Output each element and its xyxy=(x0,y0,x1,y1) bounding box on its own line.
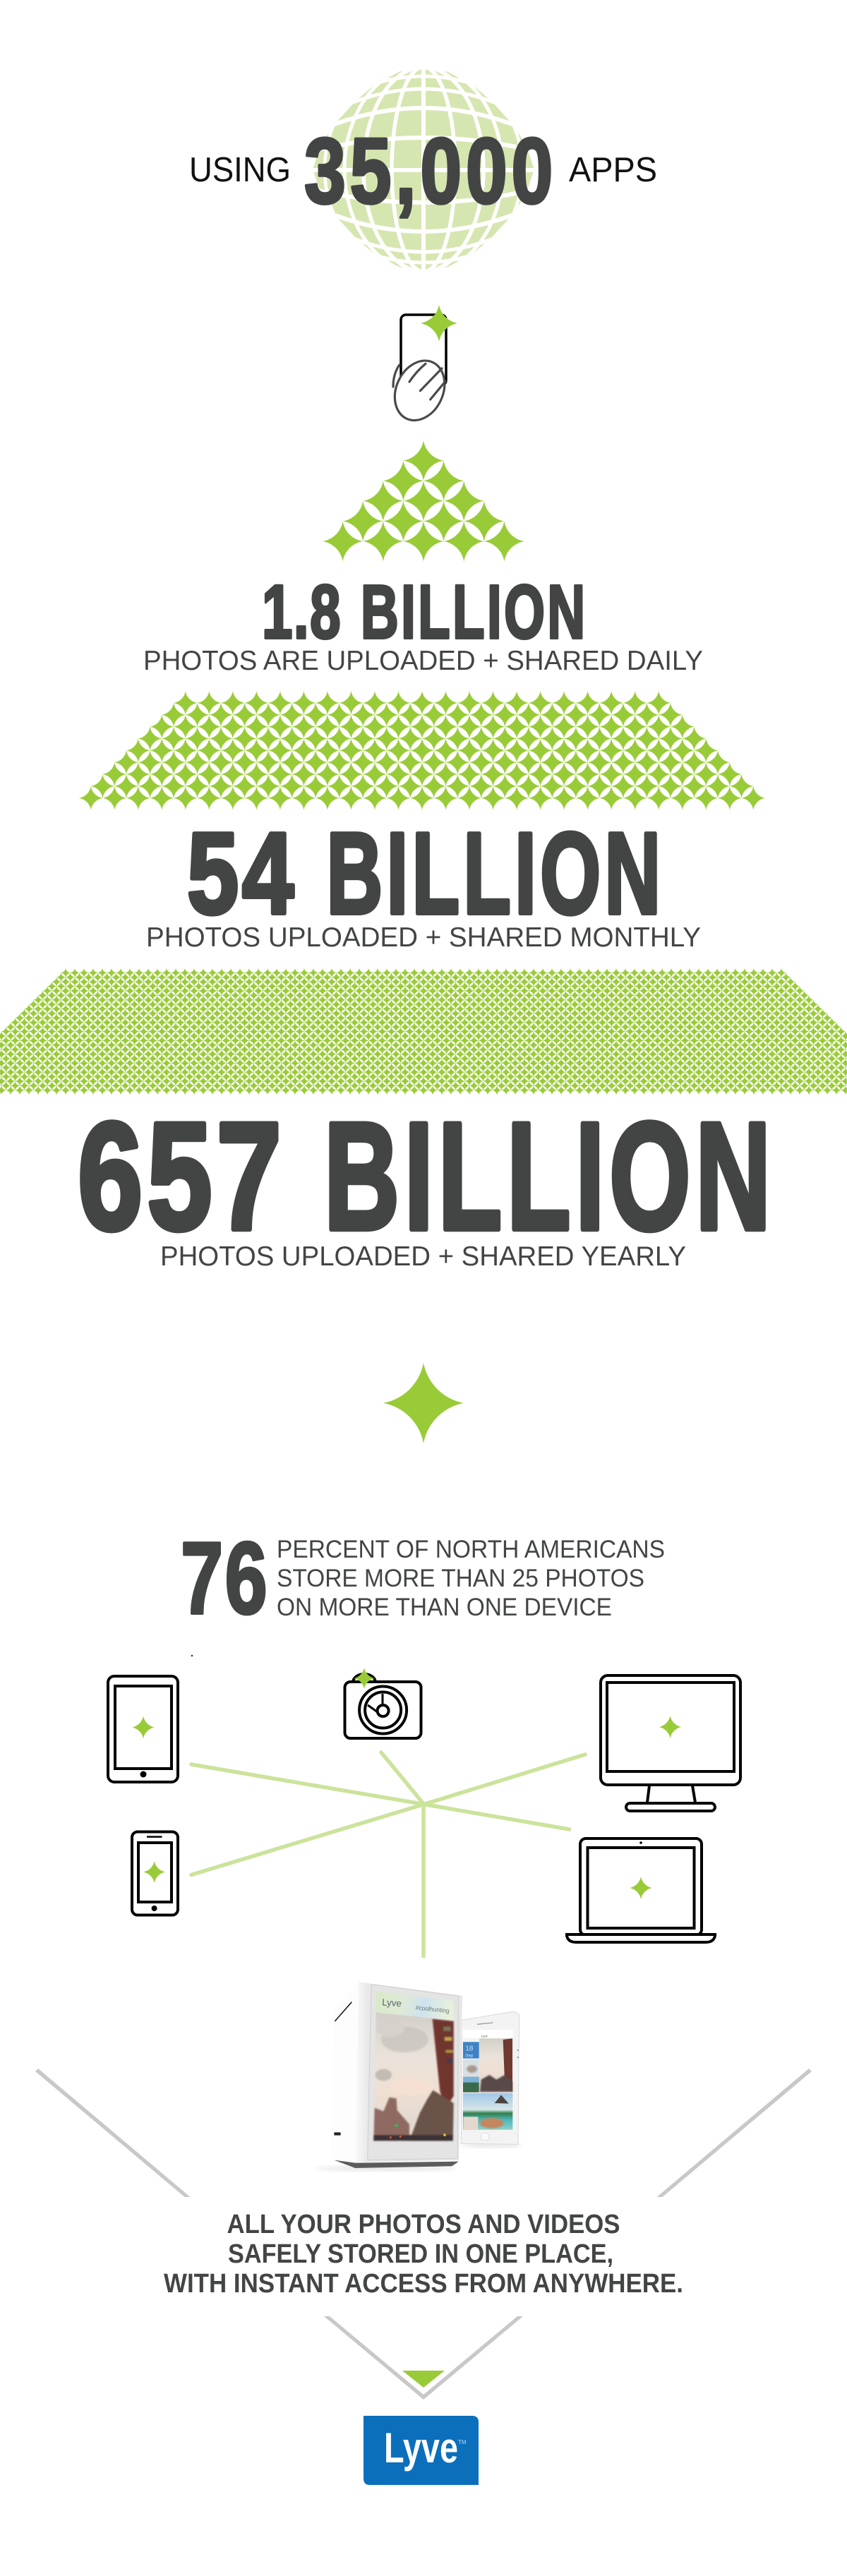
text block: percent of north americans: STORE MORE THAN 25 PHOTOS xyxy=(277,1564,644,1592)
phone body: Lyve xyxy=(481,2035,488,2038)
number: 657 billion: 657 xyxy=(78,1091,286,1262)
number: 1.8 billion: 1.8 xyxy=(262,569,342,654)
icon: desktop monitor xyxy=(601,1675,740,1811)
number: 54 billion xyxy=(187,809,665,938)
tower screen xyxy=(373,1992,454,2141)
logo: lyve: Lyve xyxy=(384,2424,458,2472)
pattern: star trapezoid fine xyxy=(0,968,847,1095)
text: apps: APPS xyxy=(569,151,657,189)
gray chevron: right xyxy=(656,2069,812,2197)
connector lines between devices xyxy=(191,1752,585,1958)
pattern: star triangle xyxy=(323,440,524,562)
number: 35,000: 35,000 xyxy=(304,119,557,223)
phone body xyxy=(461,2011,519,2144)
number: 1.8 billion xyxy=(262,569,587,654)
number: 657 billion xyxy=(78,1091,776,1262)
tower screen: Lyve xyxy=(382,1997,402,2009)
text block: all your photos: ALL YOUR PHOTOS AND VIDEOS xyxy=(227,2210,620,2239)
text block: percent of north americans: PERCENT OF NORTH AMERICANS xyxy=(277,1535,665,1563)
green triangle arrow xyxy=(402,2371,445,2388)
icon: hand holding phone xyxy=(385,305,457,428)
product: lyve device and phone xyxy=(316,1982,522,2171)
phone body: Sep xyxy=(465,2054,474,2059)
icon: smartphone xyxy=(132,1832,178,1915)
gray chevron: down arrow xyxy=(324,2316,523,2400)
phone body: 18 xyxy=(465,2045,474,2053)
icon: laptop xyxy=(567,1838,715,1942)
number: 76: 76 xyxy=(181,1521,269,1635)
caption: yearly: PHOTOS UPLOADED + SHARED YEARLY xyxy=(160,1241,686,1272)
logo: lyve: TM xyxy=(458,2439,467,2445)
caption: monthly: PHOTOS UPLOADED + SHARED MONTHLY xyxy=(146,922,701,953)
text block: all your photos: SAFELY STORED IN ONE PLACE, xyxy=(228,2239,613,2269)
tower body xyxy=(330,1982,462,2168)
text: using: USING xyxy=(189,151,291,189)
gray chevron: left xyxy=(35,2069,191,2197)
globe xyxy=(313,69,534,270)
number: 54 billion: 54 xyxy=(187,809,297,938)
pattern: star trapezoid medium xyxy=(79,691,765,810)
text block: percent of north americans xyxy=(277,1535,665,1621)
text block: percent of north americans: ON MORE THAN ONE DEVICE xyxy=(277,1593,612,1621)
logo: lyve xyxy=(364,2416,479,2485)
text block: all your photos xyxy=(164,2210,683,2299)
icon: large star xyxy=(383,1363,464,1443)
icon: camera xyxy=(344,1668,421,1738)
number: 54 billion: BILLION xyxy=(326,809,665,938)
number: 1.8 billion: BILLION xyxy=(361,569,587,654)
tower screen: #coolhunting xyxy=(415,2004,450,2014)
caption: daily: PHOTOS ARE UPLOADED + SHARED DAILY xyxy=(143,646,703,676)
text block: all your photos: WITH INSTANT ACCESS FROM ANYWHERE. xyxy=(164,2269,683,2299)
icon: tablet xyxy=(108,1676,178,1782)
